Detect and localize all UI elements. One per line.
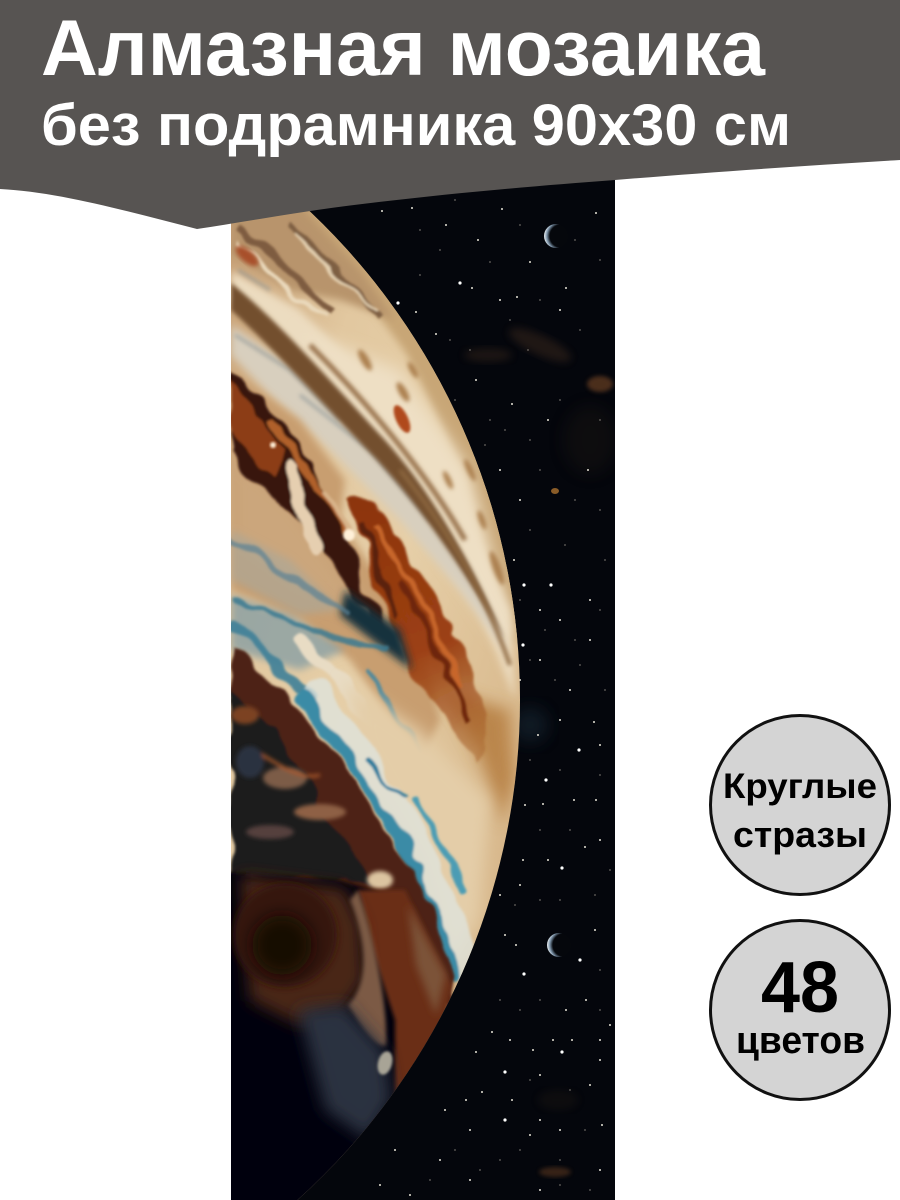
icon: upper moon xyxy=(544,224,559,248)
header banner xyxy=(0,0,900,229)
badge text line 2: стразы xyxy=(733,814,867,855)
bright spot xyxy=(343,529,355,541)
teal turbulent band xyxy=(300,695,468,975)
orange spot top left xyxy=(232,242,262,270)
badge: round rhinestones xyxy=(710,716,890,894)
great dark storm xyxy=(240,875,365,1025)
badge: 48 colours xyxy=(710,920,890,1100)
dark blue shadow by storm xyxy=(340,590,412,670)
badge text line 1: Круглые xyxy=(723,767,877,806)
cream band xyxy=(231,270,515,700)
red spot xyxy=(392,403,412,435)
badge label: цветов xyxy=(736,1020,865,1062)
upper swirl relief xyxy=(235,228,380,320)
title: Алмазная мозаика xyxy=(41,3,766,92)
dark brown stripes xyxy=(231,283,505,640)
stars xyxy=(380,200,610,1195)
blue patches left xyxy=(231,530,345,670)
lower red-brown belt xyxy=(358,890,452,1095)
dark turbulent belt xyxy=(231,650,455,1010)
storm tail glow xyxy=(445,690,515,825)
blue wisps upper xyxy=(231,540,420,750)
panel: mosaic picture of planet in space xyxy=(220,170,616,1200)
pale cream lower field xyxy=(345,680,490,970)
planet xyxy=(231,211,520,1200)
blue-grey lower shadow xyxy=(298,1005,392,1140)
lower shadow mass xyxy=(231,870,444,1200)
upper tan band xyxy=(231,212,389,318)
subtitle: без подрамника 90х30 см xyxy=(41,93,791,158)
red-orange storm xyxy=(348,497,487,765)
dark swirl xyxy=(231,370,384,623)
nebula glow xyxy=(464,322,616,1177)
brown-tan rim xyxy=(348,890,386,1046)
badge number: 48 xyxy=(761,948,839,1028)
small tan spots xyxy=(356,348,507,586)
limb tan edge xyxy=(300,205,520,640)
icon: lower moon xyxy=(547,933,562,957)
blue-grey wisps xyxy=(231,325,505,650)
lower-mid tan field xyxy=(231,370,440,760)
pale oval xyxy=(375,1050,395,1076)
